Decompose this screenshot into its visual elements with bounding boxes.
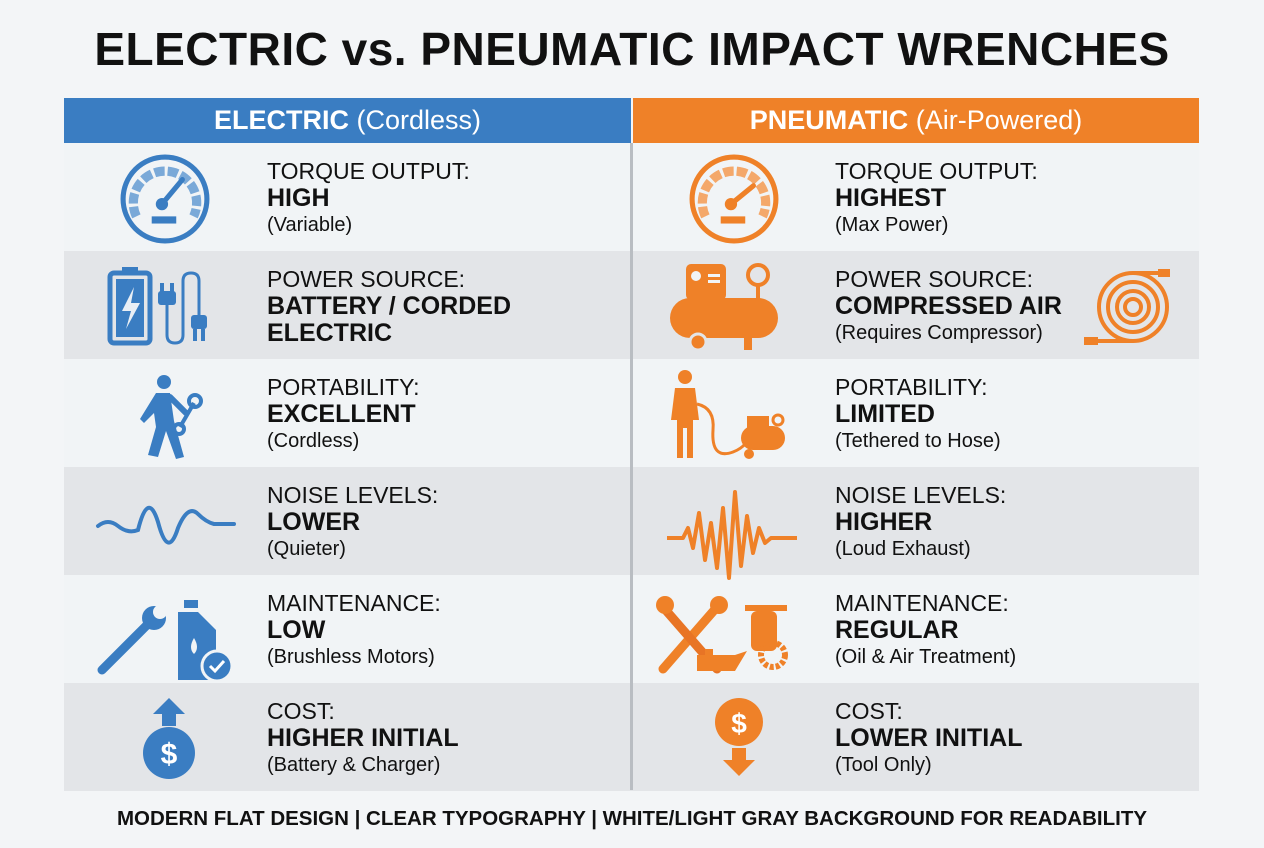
text: portability: LIMITED (835, 400, 935, 428)
text: portability (267, 374, 420, 452)
icon: gauge blue (120, 154, 210, 244)
text: torque: HIGH (267, 184, 330, 212)
text: portability: PORTABILITY: (267, 374, 420, 400)
text: maintenance: MAINTENANCE: (835, 590, 1009, 616)
text: torque: HIGHEST (835, 184, 946, 212)
icon: loud wave (667, 490, 797, 580)
icon: wrench and oil bottle (98, 600, 230, 680)
text: portability (835, 374, 1001, 452)
text: cost (267, 698, 459, 776)
text: torque: (Max Power) (835, 214, 948, 236)
icon: smooth wave (96, 506, 236, 545)
icon: cost down: $ (731, 708, 747, 739)
text: cost: COST: (835, 698, 903, 724)
text: power source (267, 266, 511, 347)
icon: compressor (670, 263, 778, 350)
header: electric (64, 98, 631, 143)
text: torque (267, 158, 470, 236)
text: torque: (Variable) (267, 214, 352, 236)
text: noise (835, 482, 1006, 560)
text: noise: (Quieter) (267, 538, 346, 560)
text: noise (267, 482, 438, 560)
footer: MODERN FLAT DESIGN | CLEAR TYPOGRAPHY | WHITE/LIGHT GRAY BACKGROUND FOR READABILITY (117, 807, 1147, 830)
icon: walking person with wrench (140, 375, 203, 459)
icon: cost up: $ (161, 738, 178, 771)
text: portability: (Tethered to Hose) (835, 430, 1001, 452)
text: power source: POWER SOURCE: (267, 266, 465, 292)
text: noise: NOISE LEVELS: (267, 482, 438, 508)
text: cost: COST: (267, 698, 335, 724)
text: torque: TORQUE OUTPUT: (835, 158, 1038, 184)
text: torque: TORQUE OUTPUT: (267, 158, 470, 184)
text: portability: (Cordless) (267, 430, 359, 452)
text: power source: BATTERY / CORDED (267, 292, 511, 320)
icon: hose reel (1084, 269, 1170, 345)
text: cost (835, 698, 1022, 776)
header: pneumatic (633, 98, 1199, 143)
header: electric: ELECTRIC (Cordless) (214, 105, 481, 135)
text: power source: ELECTRIC (267, 319, 392, 347)
icon: cost up (143, 698, 195, 779)
icon: gauge orange (690, 154, 778, 244)
icon: battery and plug (108, 267, 207, 346)
text: power source: (Requires Compressor) (835, 322, 1043, 344)
text: maintenance: REGULAR (835, 616, 959, 644)
text: torque (835, 158, 1038, 236)
text: cost: (Battery & Charger) (267, 754, 440, 776)
text: power source: POWER SOURCE: (835, 266, 1033, 292)
text: maintenance: (Brushless Motors) (267, 646, 435, 668)
text: cost: (Tool Only) (835, 754, 932, 776)
text: maintenance: LOW (267, 616, 325, 644)
text: noise: (Loud Exhaust) (835, 538, 971, 560)
panel: electric column (96, 154, 511, 779)
text: maintenance (835, 590, 1016, 668)
text: cost: HIGHER INITIAL (267, 724, 459, 752)
header: pneumatic: PNEUMATIC (Air-Powered) (750, 105, 1082, 135)
text: portability: PORTABILITY: (835, 374, 988, 400)
text: noise: LOWER (267, 508, 360, 536)
text: noise: HIGHER (835, 508, 932, 536)
title: ELECTRIC vs. PNEUMATIC IMPACT WRENCHES (94, 23, 1170, 75)
text: power source: COMPRESSED AIR (835, 292, 1062, 320)
text: portability: EXCELLENT (267, 400, 416, 428)
text: power source (835, 266, 1062, 344)
text: cost: LOWER INITIAL (835, 724, 1022, 752)
text: maintenance (267, 590, 441, 668)
text: maintenance: MAINTENANCE: (267, 590, 441, 616)
row backgrounds (64, 143, 1199, 251)
text: maintenance: (Oil & Air Treatment) (835, 646, 1016, 668)
icon: person tethered to compressor (671, 370, 785, 459)
icon: tools and oil can (656, 596, 788, 674)
text: noise: NOISE LEVELS: (835, 482, 1006, 508)
icon: cost down (715, 698, 763, 776)
panel: pneumatic column (656, 154, 1170, 776)
